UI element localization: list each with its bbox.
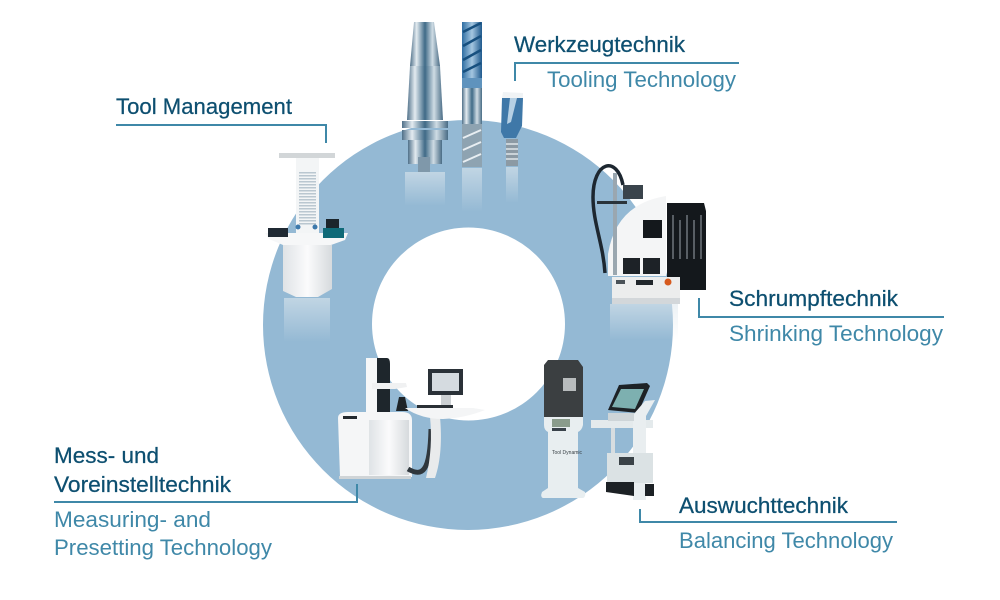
label: Mess- und Voreinstelltechnik: Voreinstelltechnik (54, 472, 232, 497)
icon: end mill (462, 22, 482, 212)
label: Mess- und Voreinstelltechnik: Measuring- and (54, 507, 211, 532)
label: Werkzeugtechnik: Tooling Technology (547, 67, 736, 92)
label: Mess- und Voreinstelltechnik: Mess- und (54, 443, 159, 468)
label: Mess- und Voreinstelltechnik: Presetting Technology (54, 535, 272, 560)
blue ring (263, 120, 673, 530)
label: Auswuchttechnik (640, 493, 897, 553)
label: Auswuchttechnik: Balancing Technology (679, 528, 893, 553)
label: Werkzeugtechnik (514, 32, 739, 92)
icon: modular cutter head (501, 92, 523, 203)
label: Werkzeugtechnik: Werkzeugtechnik (514, 32, 686, 57)
label: Auswuchttechnik: Auswuchttechnik (679, 493, 849, 518)
label: Tool Management: Tool Management (116, 94, 292, 119)
icon: tool holder (402, 22, 448, 206)
label: Schrumpftechnik (699, 286, 944, 346)
icon: shrinking machine (593, 166, 706, 340)
icon: tool management stand (265, 153, 348, 342)
icon: balancing machine (541, 360, 585, 498)
label: Schrumpftechnik: Shrinking Technology (729, 321, 943, 346)
label: Schrumpftechnik: Schrumpftechnik (729, 286, 899, 311)
label: Mess- und Voreinstelltechnik (54, 443, 357, 560)
label: Tool Management (116, 94, 326, 143)
icon: balancing machine: Tool Dynamic (552, 450, 583, 456)
icon: balancing terminal (591, 383, 655, 500)
icon: presetting machine (338, 358, 485, 479)
